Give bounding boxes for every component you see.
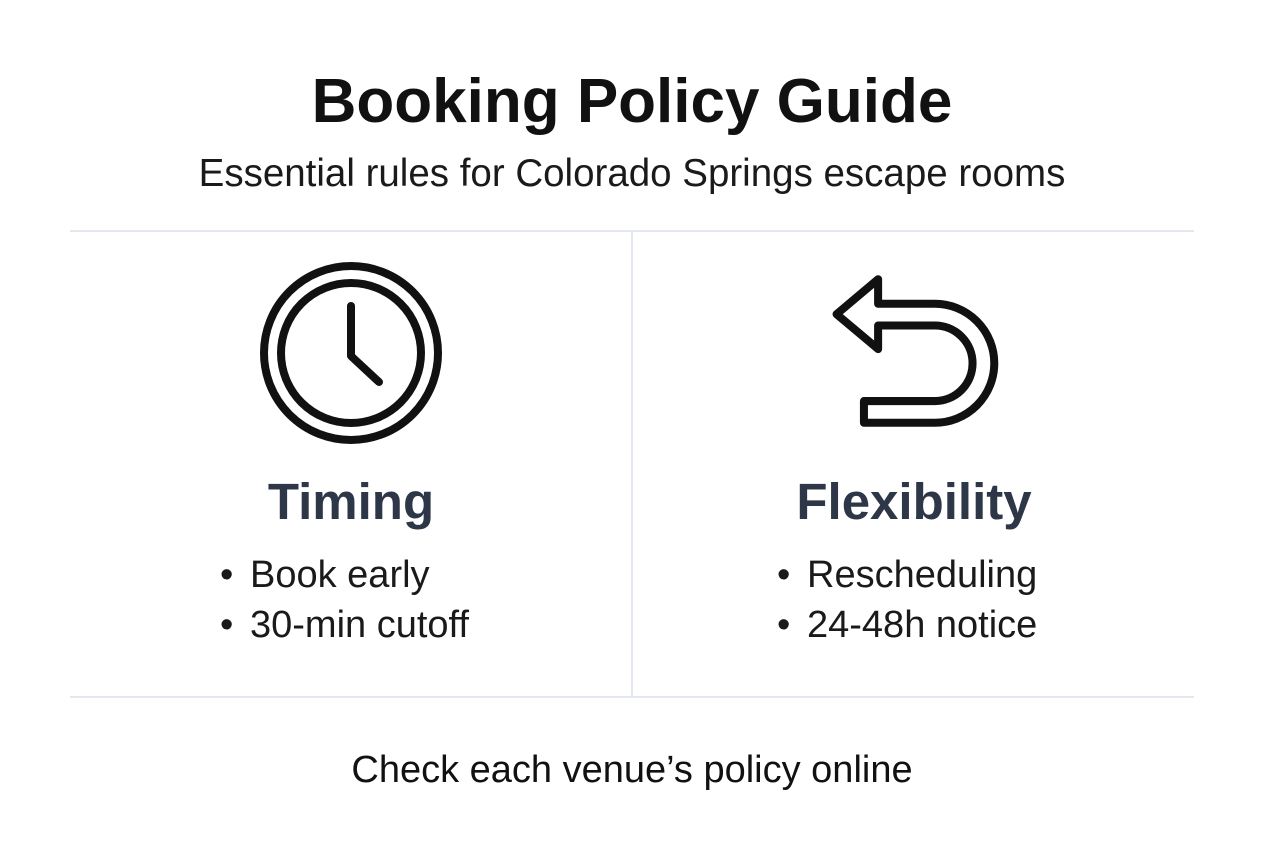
icon: clock [260,262,442,444]
heading: flexibility: Flexibility [796,473,1032,530]
bullet list: timing: Book early [250,554,430,596]
footer note: Check each venue’s policy online [351,749,913,791]
bullet list: timing: • [220,554,233,596]
bullet list: flexibility: • [777,554,790,596]
bullet list: flexibility: 24-48h notice [807,604,1037,646]
heading: timing: Timing [268,473,434,530]
bullet list: timing: • [220,604,233,646]
bullet list: flexibility [777,554,1037,646]
icon: return arrow [832,275,998,427]
panel: timing [220,262,469,646]
bullet list: flexibility: • [777,604,790,646]
subtitle: Essential rules for Colorado Springs escape rooms [199,152,1065,195]
bullet list: flexibility: Rescheduling [807,554,1037,596]
bullet list: timing: 30-min cutoff [250,604,469,646]
bullet list: timing [220,554,469,646]
title: Booking Policy Guide [312,67,952,136]
panel: flexibility [777,275,1037,646]
